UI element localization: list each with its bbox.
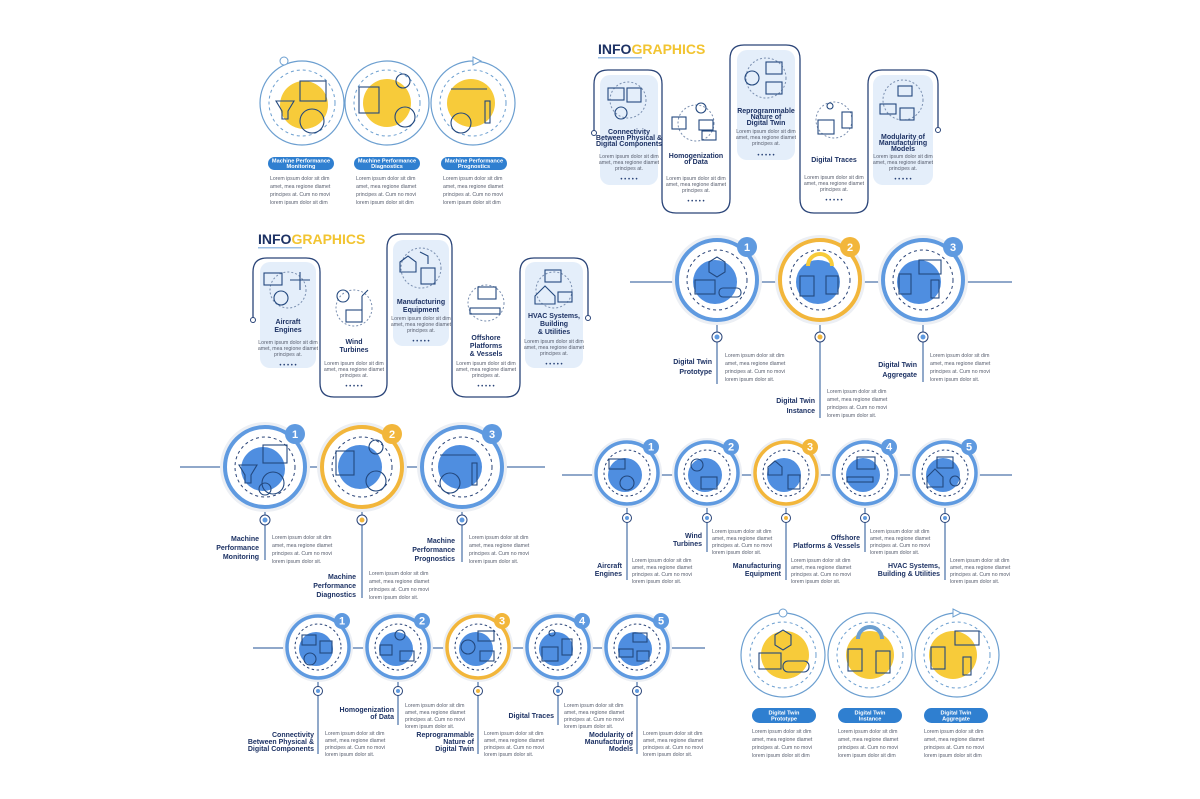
text: aggregate: amet, mea regione diamet bbox=[930, 361, 991, 367]
label pill: prognostics: Prognostics bbox=[458, 164, 490, 170]
text: reprogrammable: Reprogrammable bbox=[416, 732, 474, 739]
text: manufacturing: Equipment bbox=[745, 571, 782, 578]
text: digital traces: lorem ipsum dolor sit. bbox=[564, 724, 613, 730]
text blocks: principes at. Cum no movi bbox=[924, 745, 984, 751]
text: homogenization bbox=[340, 703, 466, 730]
text: wind: amet, mea regione diamet bbox=[712, 536, 773, 542]
card 2 bbox=[666, 103, 727, 205]
circle 3: manufacturing: 3 bbox=[807, 442, 813, 454]
text: prototype bbox=[673, 353, 786, 383]
text: prototype: amet, mea regione diamet bbox=[725, 361, 786, 367]
text: prognostics: principes at. Cum no movi bbox=[469, 551, 529, 557]
text: offshore: amet, mea regione diamet bbox=[870, 536, 931, 542]
text: prognostics: Prognostics bbox=[415, 556, 455, 563]
card: manufacturing equipment: principes at. bbox=[407, 328, 435, 334]
label pill: prognostics: Machine Performance bbox=[445, 158, 503, 164]
text: digital traces bbox=[508, 703, 625, 730]
text: diagnostics bbox=[313, 571, 430, 601]
text: manufacturing: Lorem ipsum dolor sit dim bbox=[791, 558, 850, 564]
text: offshore: principes at. Cum no movi bbox=[870, 543, 930, 549]
card: HVAC: Lorem ipsum dolor sit dim bbox=[524, 339, 584, 345]
card: offshore platforms bbox=[456, 285, 517, 390]
card: wind turbines: Lorem ipsum dolor sit dim bbox=[324, 361, 384, 367]
text: digital traces: Lorem ipsum dolor sit dim bbox=[564, 703, 623, 709]
text: prognostics: lorem ipsum dolor sit. bbox=[469, 559, 518, 565]
text: instance: Instance bbox=[787, 408, 815, 415]
text: diagnostics: principes at. Cum no movi bbox=[369, 587, 429, 593]
text: diagnostics: lorem ipsum dolor sit. bbox=[369, 595, 418, 601]
label pill: instance: Digital Twin bbox=[855, 710, 886, 716]
text: connectivity: Lorem ipsum dolor sit dim bbox=[325, 731, 384, 737]
text: modularity: Lorem ipsum dolor sit dim bbox=[643, 731, 702, 737]
circle 4: offshore bbox=[830, 438, 900, 508]
card: offshore platforms: Offshore bbox=[471, 335, 501, 342]
pins bbox=[712, 332, 928, 342]
card: aircraft engines: Lorem ipsum dolor sit dim bbox=[258, 340, 318, 346]
card 4: • • • • • bbox=[825, 198, 843, 204]
card: aircraft engines: amet, mea regione diamet bbox=[258, 346, 319, 352]
text blocks: amet, mea regione diamet bbox=[356, 184, 417, 190]
circle: prognostics bbox=[431, 41, 515, 145]
text blocks: lorem ipsum dolor sit dim bbox=[356, 200, 414, 206]
card 2: Lorem ipsum dolor sit dim bbox=[666, 176, 726, 182]
card 2: of Data bbox=[684, 159, 708, 166]
circle 1: monitoring bbox=[220, 422, 310, 512]
label pill: monitoring: Machine Performance bbox=[272, 158, 330, 164]
card 5: Models bbox=[891, 146, 915, 153]
circle: aggregate bbox=[915, 609, 999, 697]
text: offshore: Offshore bbox=[831, 535, 860, 542]
card: HVAC: • • • • • bbox=[545, 362, 563, 368]
card: offshore platforms: & Vessels bbox=[470, 351, 502, 358]
panel: industries serpentine (middle-left) bbox=[250, 231, 590, 397]
panel: digital twin circles (bottom-right) bbox=[741, 609, 999, 759]
card 3: Nature of bbox=[751, 114, 782, 121]
text: homogenization: lorem ipsum dolor sit. bbox=[405, 724, 454, 730]
text: reprogrammable: principes at. Cum no movi bbox=[484, 745, 544, 751]
label pill: aggregate: Aggregate bbox=[942, 716, 970, 722]
text: modularity: principes at. Cum no movi bbox=[643, 745, 703, 751]
card: wind turbines: Wind bbox=[345, 339, 363, 346]
text: monitoring: principes at. Cum no movi bbox=[272, 551, 332, 557]
text: aircraft: Aircraft bbox=[597, 563, 623, 570]
text: digital traces: principes at. Cum no movi bbox=[564, 717, 624, 723]
label pill: prognostics bbox=[441, 157, 507, 170]
text: wind bbox=[673, 529, 773, 556]
card 2: Homogenization bbox=[669, 153, 723, 160]
circle 1: connectivity: 1 bbox=[339, 616, 345, 628]
label pill: diagnostics: Machine Performance bbox=[358, 158, 416, 164]
card: wind turbines: amet, mea regione diamet bbox=[324, 367, 385, 373]
label pill: monitoring: Monitoring bbox=[287, 164, 316, 170]
text: aggregate bbox=[878, 353, 991, 383]
circle 2: homogenization: 2 bbox=[419, 616, 425, 628]
card: manufacturing equipment: • • • • • bbox=[412, 339, 430, 345]
card 5: • • • • • bbox=[894, 177, 912, 183]
text: connectivity: lorem ipsum dolor sit. bbox=[325, 752, 374, 758]
card 4: Lorem ipsum dolor sit dim bbox=[804, 175, 864, 181]
text: digital traces: Digital Traces bbox=[508, 713, 554, 720]
text: homogenization: Homogenization bbox=[340, 707, 394, 714]
text: digital traces: amet, mea regione diamet bbox=[564, 710, 625, 716]
text blocks: Lorem ipsum dolor sit dim bbox=[270, 176, 329, 182]
text: diagnostics: Machine bbox=[328, 574, 356, 581]
heading: INFOGRAPHICS: INFOGRAPHICS bbox=[258, 231, 365, 247]
circle: monitoring bbox=[260, 57, 344, 145]
text: manufacturing: lorem ipsum dolor sit. bbox=[791, 579, 840, 585]
text: diagnostics: Lorem ipsum dolor sit dim bbox=[369, 571, 428, 577]
card 1: amet, mea regione diamet bbox=[599, 160, 660, 166]
card 5: principes at. bbox=[889, 166, 917, 172]
text: manufacturing: Manufacturing bbox=[733, 563, 781, 570]
circle 1: aircraft: 1 bbox=[648, 442, 654, 454]
card 3: Reprogrammable bbox=[737, 108, 795, 115]
text: aircraft: amet, mea regione diamet bbox=[632, 565, 693, 571]
panel: digital twin timeline (middle-right) bbox=[630, 235, 1012, 419]
text: connectivity bbox=[248, 731, 386, 758]
text: connectivity: principes at. Cum no movi bbox=[325, 745, 385, 751]
card 1: Between Physical & bbox=[596, 135, 662, 142]
circle 2: instance bbox=[775, 235, 865, 325]
text: diagnostics: Performance bbox=[313, 583, 356, 590]
text: connectivity: amet, mea regione diamet bbox=[325, 738, 386, 744]
text: modularity: Modularity of bbox=[589, 732, 634, 739]
text blocks: amet, mea regione diamet bbox=[838, 737, 899, 743]
text: diagnostics: Diagnostics bbox=[316, 592, 356, 599]
card 3: amet, mea regione diamet bbox=[736, 135, 797, 141]
text: offshore: Platforms & Vessels bbox=[793, 543, 860, 550]
text blocks: Lorem ipsum dolor sit dim bbox=[443, 176, 502, 182]
card: offshore platforms: • • • • • bbox=[477, 384, 495, 390]
circle: instance bbox=[828, 613, 912, 697]
text: aircraft bbox=[595, 558, 693, 585]
card: aircraft engines: Aircraft bbox=[276, 319, 301, 326]
card: wind turbines: principes at. bbox=[340, 373, 368, 379]
card 3: Digital Twin bbox=[747, 120, 785, 127]
text: connectivity: Connectivity bbox=[272, 732, 314, 739]
text: prototype: Lorem ipsum dolor sit dim bbox=[725, 353, 784, 359]
card: manufacturing equipment: Lorem ipsum dolor sit dim bbox=[391, 316, 451, 322]
text: wind: Turbines bbox=[673, 541, 702, 548]
text: prognostics: Lorem ipsum dolor sit dim bbox=[469, 535, 528, 541]
text: offshore: Lorem ipsum dolor sit dim bbox=[870, 529, 929, 535]
circle 3: prognostics bbox=[417, 422, 507, 512]
text: instance bbox=[776, 389, 888, 419]
text: aircraft: principes at. Cum no movi bbox=[632, 572, 692, 578]
text blocks: lorem ipsum dolor sit dim bbox=[924, 753, 982, 759]
text: manufacturing: principes at. Cum no movi bbox=[791, 572, 851, 578]
circle 4: digital traces: 4 bbox=[579, 616, 586, 628]
card: manufacturing equipment bbox=[391, 248, 452, 345]
card: HVAC bbox=[524, 270, 585, 368]
panel: industries timeline (middle-right) bbox=[562, 438, 1012, 585]
label pill: prototype: Prototype bbox=[771, 716, 797, 722]
card 5: amet, mea regione diamet bbox=[873, 160, 934, 166]
circle 3: reprogrammable bbox=[443, 612, 513, 682]
text: monitoring: lorem ipsum dolor sit. bbox=[272, 559, 321, 565]
text: HVAC: lorem ipsum dolor sit. bbox=[950, 579, 999, 585]
card: offshore platforms: principes at. bbox=[472, 373, 500, 379]
card 3 bbox=[736, 58, 797, 159]
card: HVAC: amet, mea regione diamet bbox=[524, 345, 585, 351]
text: monitoring: Monitoring bbox=[223, 554, 259, 561]
text: reprogrammable: Nature of bbox=[443, 739, 475, 746]
circle 5: HVAC bbox=[910, 438, 980, 508]
text: modularity bbox=[585, 731, 704, 758]
text: aggregate: lorem ipsum dolor sit. bbox=[930, 377, 979, 383]
text blocks: principes at. Cum no movi bbox=[838, 745, 898, 751]
text: HVAC bbox=[878, 558, 1011, 585]
circle: prototype bbox=[741, 609, 825, 697]
label pill: monitoring bbox=[268, 157, 334, 170]
text: instance: Digital Twin bbox=[776, 398, 815, 405]
pins bbox=[260, 515, 467, 525]
pins bbox=[622, 514, 950, 522]
text blocks: Lorem ipsum dolor sit dim bbox=[752, 729, 811, 735]
circle 5: modularity: 5 bbox=[658, 616, 664, 628]
card 3: Lorem ipsum dolor sit dim bbox=[736, 129, 796, 135]
text blocks: Lorem ipsum dolor sit dim bbox=[356, 176, 415, 182]
text: aircraft: Engines bbox=[595, 571, 622, 578]
card: aircraft engines bbox=[258, 272, 319, 369]
text: wind: principes at. Cum no movi bbox=[712, 543, 772, 549]
text: diagnostics: amet, mea regione diamet bbox=[369, 579, 430, 585]
pins bbox=[314, 686, 642, 696]
card 1: Lorem ipsum dolor sit dim bbox=[599, 154, 659, 160]
card: offshore platforms: Platforms bbox=[470, 343, 502, 350]
text: offshore: lorem ipsum dolor sit. bbox=[870, 550, 919, 556]
card: wind turbines bbox=[324, 290, 385, 390]
card: aircraft engines: • • • • • bbox=[279, 363, 297, 369]
circle 1: monitoring: 1 bbox=[292, 429, 298, 441]
circle 1: connectivity bbox=[283, 612, 353, 682]
text: aggregate: Aggregate bbox=[882, 372, 917, 379]
text: prototype: principes at. Cum no movi bbox=[725, 369, 785, 375]
card: wind turbines: • • • • • bbox=[345, 384, 363, 390]
text: connectivity: Between Physical & bbox=[248, 739, 314, 746]
text: modularity: Manufacturing bbox=[585, 739, 633, 746]
card: manufacturing equipment: Equipment bbox=[403, 307, 440, 314]
text: manufacturing bbox=[733, 558, 852, 585]
text: prototype: Digital Twin bbox=[673, 359, 712, 366]
label pill: instance: Instance bbox=[859, 716, 881, 722]
text blocks bbox=[270, 176, 504, 206]
text: manufacturing: amet, mea regione diamet bbox=[791, 565, 852, 571]
text blocks: principes at. Cum no movi bbox=[443, 192, 503, 198]
card 2: • • • • • bbox=[687, 199, 705, 205]
text: aggregate: Digital Twin bbox=[878, 362, 917, 369]
circle 4: offshore: 4 bbox=[886, 442, 893, 454]
circle 5: HVAC: 5 bbox=[966, 442, 972, 454]
text: homogenization: amet, mea regione diamet bbox=[405, 710, 466, 716]
card: manufacturing equipment: Manufacturing bbox=[397, 299, 445, 306]
card 4: principes at. bbox=[820, 187, 848, 193]
card: wind turbines: Turbines bbox=[339, 347, 369, 354]
panel: machine performance circles (top-left) bbox=[260, 41, 515, 206]
text: wind: Wind bbox=[685, 533, 702, 540]
card 1: Digital Components bbox=[596, 141, 662, 148]
text: wind: lorem ipsum dolor sit. bbox=[712, 550, 761, 556]
text: homogenization: principes at. Cum no movi bbox=[405, 717, 465, 723]
panel: digital twin features (top-right serpentine) bbox=[592, 41, 940, 213]
text blocks: principes at. Cum no movi bbox=[356, 192, 416, 198]
text: homogenization: of Data bbox=[370, 714, 394, 721]
card 5: Lorem ipsum dolor sit dim bbox=[873, 154, 933, 160]
text blocks: lorem ipsum dolor sit dim bbox=[270, 200, 328, 206]
card: HVAC: Building bbox=[540, 321, 568, 328]
text: prototype: Prototype bbox=[679, 369, 712, 376]
text: reprogrammable: amet, mea regione diamet bbox=[484, 738, 545, 744]
circle 1: prototype bbox=[672, 235, 762, 325]
card: aircraft engines: Engines bbox=[274, 327, 302, 334]
heading: INFOGRAPHICS: INFOGRAPHICS bbox=[598, 41, 705, 57]
text blocks: Lorem ipsum dolor sit dim bbox=[924, 729, 983, 735]
card: HVAC: HVAC Systems, bbox=[528, 313, 580, 320]
card 5: Manufacturing bbox=[879, 140, 927, 147]
text: instance: amet, mea regione diamet bbox=[827, 397, 888, 403]
text blocks: amet, mea regione diamet bbox=[924, 737, 985, 743]
text: aggregate: principes at. Cum no movi bbox=[930, 369, 990, 375]
card: offshore platforms: amet, mea regione diamet bbox=[456, 367, 517, 373]
text: prognostics: Machine bbox=[427, 538, 455, 545]
circle 4: digital traces bbox=[523, 612, 593, 682]
card 2: amet, mea regione diamet bbox=[666, 182, 727, 188]
text: monitoring: Machine bbox=[231, 536, 259, 543]
card 4: Digital Traces bbox=[811, 157, 857, 164]
circle 2: wind: 2 bbox=[728, 442, 734, 454]
card 1: Connectivity bbox=[608, 129, 650, 136]
circle 5: modularity bbox=[602, 612, 672, 682]
circle 3: aggregate bbox=[878, 235, 968, 325]
circle 2: instance: 2 bbox=[847, 242, 853, 254]
label pill: aggregate bbox=[924, 708, 988, 723]
text blocks: amet, mea regione diamet bbox=[752, 737, 813, 743]
circle 3: manufacturing bbox=[751, 438, 821, 508]
card 1 bbox=[596, 82, 662, 183]
card 3: principes at. bbox=[752, 141, 780, 147]
text: HVAC: Lorem ipsum dolor sit dim bbox=[950, 558, 1009, 564]
circle 1: prototype: 1 bbox=[744, 242, 750, 254]
text: wind: Lorem ipsum dolor sit dim bbox=[712, 529, 771, 535]
text: HVAC: principes at. Cum no movi bbox=[950, 572, 1010, 578]
text blocks: principes at. Cum no movi bbox=[752, 745, 812, 751]
card 3: • • • • • bbox=[757, 153, 775, 159]
text: reprogrammable: lorem ipsum dolor sit. bbox=[484, 752, 533, 758]
text blocks: lorem ipsum dolor sit dim bbox=[838, 753, 896, 759]
text blocks: amet, mea regione diamet bbox=[270, 184, 331, 190]
text: aggregate: Lorem ipsum dolor sit dim bbox=[930, 353, 989, 359]
text: modularity: amet, mea regione diamet bbox=[643, 738, 704, 744]
text: prognostics: amet, mea regione diamet bbox=[469, 543, 530, 549]
text blocks: amet, mea regione diamet bbox=[443, 184, 504, 190]
text blocks: lorem ipsum dolor sit dim bbox=[752, 753, 810, 759]
circle 3: aggregate: 3 bbox=[950, 242, 956, 254]
card 1: principes at. bbox=[615, 166, 643, 172]
circle 2: homogenization bbox=[363, 612, 433, 682]
text: HVAC: amet, mea regione diamet bbox=[950, 565, 1011, 571]
card 5: Modularity of bbox=[881, 134, 926, 141]
text: monitoring: Lorem ipsum dolor sit dim bbox=[272, 535, 331, 541]
circle: diagnostics bbox=[345, 61, 429, 145]
text: HVAC: HVAC Systems, bbox=[888, 563, 940, 570]
text: aircraft: Lorem ipsum dolor sit dim bbox=[632, 558, 691, 564]
text: prototype: lorem ipsum dolor sit. bbox=[725, 377, 774, 383]
text: modularity: lorem ipsum dolor sit. bbox=[643, 752, 692, 758]
text: offshore bbox=[793, 529, 931, 556]
circle 3: prognostics: 3 bbox=[489, 429, 495, 441]
text: reprogrammable: Digital Twin bbox=[435, 746, 474, 753]
circle 2: wind bbox=[672, 438, 742, 508]
circle 3: reprogrammable: 3 bbox=[499, 616, 505, 628]
circle 2: diagnostics bbox=[317, 422, 407, 512]
text: prognostics bbox=[412, 535, 530, 565]
panel: machine performance timeline (middle-left) bbox=[180, 422, 545, 601]
text: aircraft: lorem ipsum dolor sit. bbox=[632, 579, 681, 585]
text: instance: lorem ipsum dolor sit. bbox=[827, 413, 876, 419]
text: HVAC: Building & Utilities bbox=[878, 571, 940, 578]
card 4 bbox=[804, 102, 865, 204]
text: instance: Lorem ipsum dolor sit dim bbox=[827, 389, 886, 395]
card 5 bbox=[873, 80, 934, 183]
card: offshore platforms: Lorem ipsum dolor sit dim bbox=[456, 361, 516, 367]
text: modularity: Models bbox=[609, 746, 633, 753]
text: monitoring: Performance bbox=[216, 545, 259, 552]
text: reprogrammable: Lorem ipsum dolor sit dim bbox=[484, 731, 543, 737]
label pill: aggregate: Digital Twin bbox=[941, 710, 972, 716]
text: instance: principes at. Cum no movi bbox=[827, 405, 887, 411]
card: HVAC: & Utilities bbox=[538, 329, 570, 336]
text: monitoring: amet, mea regione diamet bbox=[272, 543, 333, 549]
card: aircraft engines: principes at. bbox=[274, 352, 302, 358]
text: connectivity: Digital Components bbox=[248, 746, 314, 753]
text blocks bbox=[752, 729, 985, 759]
text: monitoring bbox=[216, 535, 333, 565]
text blocks: Lorem ipsum dolor sit dim bbox=[838, 729, 897, 735]
text: reprogrammable bbox=[416, 731, 545, 758]
card: manufacturing equipment: amet, mea regione diamet bbox=[391, 322, 452, 328]
text: homogenization: Lorem ipsum dolor sit dim bbox=[405, 703, 464, 709]
card 1: • • • • • bbox=[620, 177, 638, 183]
circle 2: diagnostics: 2 bbox=[389, 429, 395, 441]
text blocks: principes at. Cum no movi bbox=[270, 192, 330, 198]
panel: digital twin features timeline (bottom-left) bbox=[248, 612, 705, 758]
label pill: prototype: Digital Twin bbox=[769, 710, 800, 716]
label pill: prototype bbox=[752, 708, 816, 723]
card: HVAC: principes at. bbox=[540, 351, 568, 357]
label pill: diagnostics: Diagnostics bbox=[371, 164, 403, 170]
label pill: instance bbox=[838, 708, 902, 723]
circle 1: aircraft bbox=[592, 438, 662, 508]
label pill: diagnostics bbox=[354, 157, 420, 170]
text blocks: lorem ipsum dolor sit dim bbox=[443, 200, 501, 206]
card 4: amet, mea regione diamet bbox=[804, 181, 865, 187]
card 2: principes at. bbox=[682, 188, 710, 194]
text: prognostics: Performance bbox=[412, 547, 455, 554]
